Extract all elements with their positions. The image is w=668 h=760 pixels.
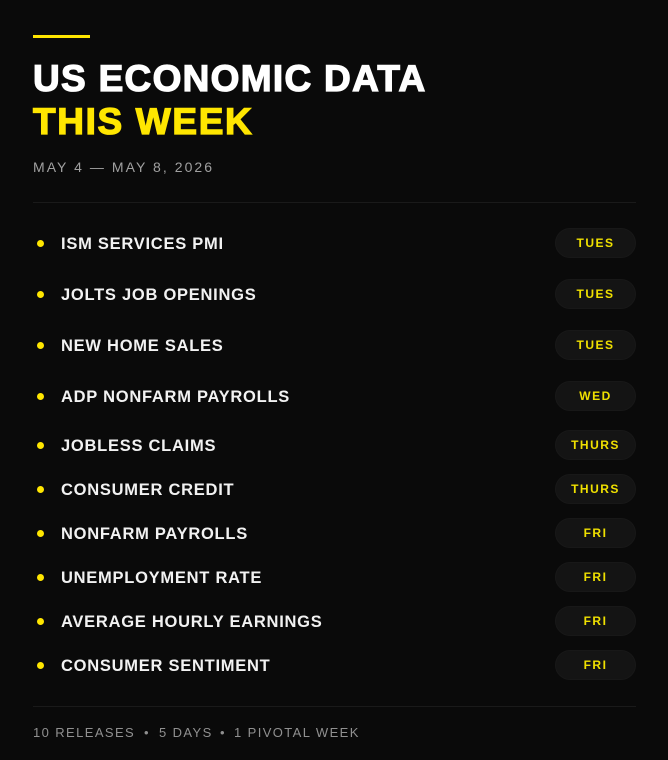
row: Nonfarm Payrolls: NONFARM PAYROLLS (61, 525, 248, 543)
row: ADP Nonfarm Payrolls: WED (579, 389, 612, 403)
row: New Home Sales: NEW HOME SALES (61, 337, 224, 355)
row: ISM Services PMI: TUES (576, 236, 614, 250)
release list (37, 228, 636, 680)
date range: MAY 4 — MAY 8, 2026 (33, 159, 214, 175)
row: New Home Sales (37, 330, 636, 360)
row: ADP Nonfarm Payrolls: ADP NONFARM PAYROLLS (61, 388, 290, 406)
footer summary: 5 DAYS (159, 725, 213, 740)
row: Average Hourly Earnings (37, 606, 636, 636)
row: Consumer Credit: CONSUMER CREDIT (61, 481, 234, 499)
footer summary: 10 RELEASES (33, 725, 135, 740)
row: ISM Services PMI: ISM SERVICES PMI (61, 235, 224, 253)
title: line one: US ECONOMIC DATA (33, 58, 427, 99)
row: JOLTS Job Openings (37, 279, 636, 309)
row: Consumer Credit: THURS (571, 482, 620, 496)
footer summary (33, 725, 360, 740)
row: Consumer Sentiment: FRI (584, 658, 607, 672)
row: Nonfarm Payrolls: FRI (584, 526, 607, 540)
row: Jobless Claims: JOBLESS CLAIMS (61, 437, 216, 455)
accent bar (33, 35, 90, 38)
row: ISM Services PMI (37, 228, 636, 258)
row: Consumer Sentiment: CONSUMER SENTIMENT (61, 657, 270, 675)
row: ADP Nonfarm Payrolls (37, 381, 636, 411)
row: JOLTS Job Openings: TUES (576, 287, 614, 301)
row: Jobless Claims: THURS (571, 438, 620, 452)
row: Consumer Sentiment (37, 650, 636, 680)
row: Unemployment Rate (37, 562, 636, 592)
row: Jobless Claims (37, 430, 636, 460)
footer summary: • (144, 725, 150, 740)
row: Consumer Credit (37, 474, 636, 504)
row: Unemployment Rate: UNEMPLOYMENT RATE (61, 569, 262, 587)
row: New Home Sales: TUES (576, 338, 614, 352)
footer summary: 1 PIVOTAL WEEK (234, 725, 360, 740)
row: JOLTS Job Openings: JOLTS JOB OPENINGS (61, 286, 256, 304)
footer summary: • (220, 725, 226, 740)
row: Average Hourly Earnings: FRI (584, 614, 607, 628)
row: Nonfarm Payrolls (37, 518, 636, 548)
title: line two: THIS WEEK (33, 101, 253, 142)
row: Average Hourly Earnings: AVERAGE HOURLY EARNINGS (61, 613, 323, 631)
row: Unemployment Rate: FRI (584, 570, 607, 584)
